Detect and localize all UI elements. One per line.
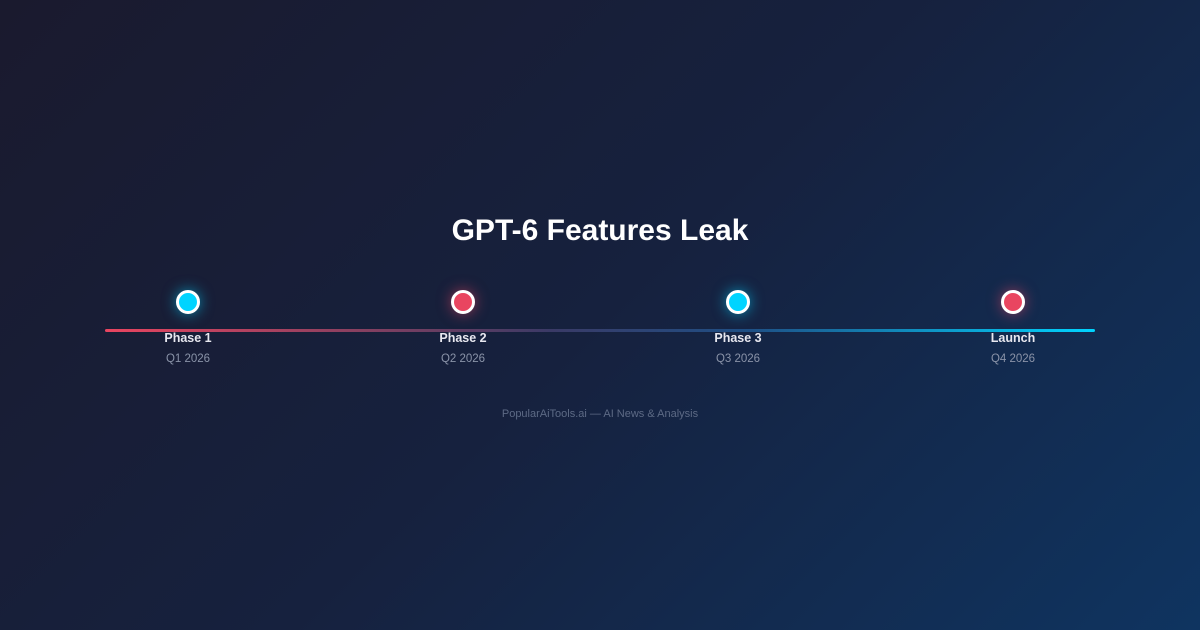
timeline line	[105, 329, 1095, 332]
label: phase 3	[714, 331, 762, 365]
label: launch: Q4 2026	[991, 353, 1035, 365]
milestone: phase 3	[718, 282, 758, 322]
milestone: phase 1	[168, 282, 208, 322]
milestone: phase 2	[442, 282, 484, 322]
label: phase 1: Q1 2026	[166, 353, 210, 365]
label: launch: Launch	[991, 331, 1035, 345]
label: phase 1	[164, 331, 212, 365]
label: phase 1: Phase 1	[164, 331, 212, 345]
label: launch	[991, 331, 1035, 365]
title: GPT-6 Features Leak	[452, 214, 748, 247]
milestone: launch	[992, 282, 1034, 322]
label: phase 3: Q3 2026	[716, 353, 760, 365]
label: phase 2: Phase 2	[439, 331, 487, 345]
label: phase 2	[439, 331, 487, 365]
label: phase 2: Q2 2026	[441, 353, 485, 365]
label: phase 3: Phase 3	[714, 331, 762, 345]
footer: PopularAiTools.ai — AI News & Analysis	[502, 408, 698, 420]
